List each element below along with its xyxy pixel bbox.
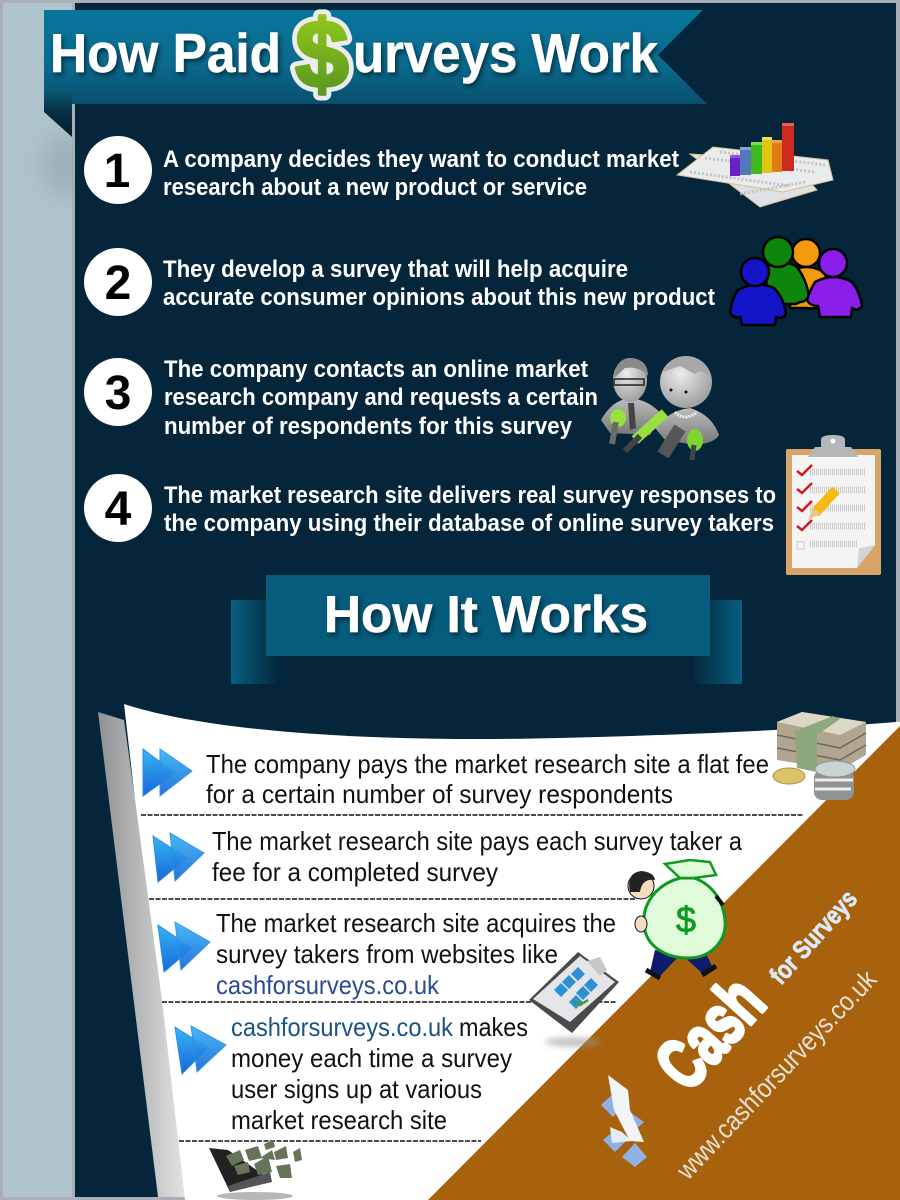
icon: tablet checklist xyxy=(529,952,619,1047)
number badge 1: 1 xyxy=(104,145,130,198)
ribbon side left xyxy=(231,600,278,684)
logo word cash: Cash xyxy=(640,962,780,1105)
step 3 text: The company contacts an online market xyxy=(164,356,588,383)
step 3 text: number of respondents for this survey xyxy=(164,413,573,440)
title text left: How Paid xyxy=(50,22,281,84)
paper shadow page xyxy=(98,712,190,1197)
number badge 3: 3 xyxy=(105,367,131,420)
step 2 text xyxy=(163,256,715,311)
item text: makes xyxy=(459,1012,528,1042)
icon: clipboard with checklist xyxy=(786,435,881,575)
legs xyxy=(650,948,712,976)
item text: cashforsurveys.co.uk xyxy=(231,1012,454,1042)
white page xyxy=(124,704,900,1200)
icon: chart on papers xyxy=(677,123,833,207)
item text: survey takers from websites like xyxy=(216,939,558,969)
ribbon centre xyxy=(266,575,710,656)
banner ribbon xyxy=(44,10,707,104)
brown corner xyxy=(428,726,900,1200)
list item 4 xyxy=(175,1012,528,1135)
paper panel xyxy=(98,704,900,1200)
dollar sign icon: $ xyxy=(295,1,349,108)
step 1 xyxy=(84,123,833,207)
item text: for a certain number of survey respondents xyxy=(206,779,673,809)
title banner xyxy=(44,1,707,140)
number badge 1 xyxy=(84,136,152,204)
number badge 4: 4 xyxy=(105,483,132,536)
step 3 xyxy=(84,356,719,460)
arrow icon xyxy=(158,922,210,972)
item text: The market research site pays each survey taker a xyxy=(212,826,742,856)
item text xyxy=(212,826,742,887)
title text right: urveys Work xyxy=(353,22,658,84)
step 2 text: accurate consumer opinions about this new product xyxy=(163,284,715,311)
item text xyxy=(206,749,769,809)
arrow icon xyxy=(143,749,192,796)
step 1 text: research about a new product or service xyxy=(163,174,587,201)
step 2 text: They develop a survey that will help acquire xyxy=(163,256,628,283)
step 3 text: research company and requests a certain xyxy=(164,384,598,411)
step 2 xyxy=(84,237,862,325)
step 4 text xyxy=(164,482,776,537)
bag xyxy=(644,878,725,958)
head xyxy=(628,873,654,899)
item text: money each time a survey xyxy=(231,1043,512,1073)
item text xyxy=(216,908,616,1000)
heading text: How It Works xyxy=(324,586,648,644)
arrow icon xyxy=(175,1026,226,1074)
number badge 2: 2 xyxy=(105,257,131,310)
item text: cashforsurveys.co.uk xyxy=(216,970,440,1000)
number badge 2 xyxy=(84,248,152,316)
item text: The company pays the market research site a flat fee xyxy=(206,749,769,779)
icon: money stack and coins xyxy=(773,712,866,800)
step 1 text: A company decides they want to conduct market xyxy=(163,146,679,173)
dollar sign icon: $ xyxy=(295,1,349,108)
item text xyxy=(231,1012,528,1135)
list item 2 xyxy=(153,826,742,887)
left side strip xyxy=(3,3,73,1197)
item text: user signs up at various xyxy=(231,1074,482,1104)
list item 3 xyxy=(158,908,616,1000)
icon: laptop with flying money xyxy=(209,1140,302,1200)
item text: The market research site acquires the xyxy=(216,908,616,938)
banner fold xyxy=(44,90,72,137)
icon: man carrying money bag: $ xyxy=(676,899,696,940)
logo words for surveys: for Surveys xyxy=(763,884,863,990)
item text: market research site xyxy=(231,1105,447,1135)
icon: man carrying money bag xyxy=(628,860,725,978)
logo mark xyxy=(601,1075,647,1167)
arrow icon xyxy=(153,833,204,882)
icon: interviewed people xyxy=(601,356,719,460)
step 1 text xyxy=(163,146,679,201)
item text: fee for a completed survey xyxy=(212,857,498,887)
ribbon side right xyxy=(694,600,742,684)
how it works heading xyxy=(231,575,742,684)
logo: cash for surveys xyxy=(601,884,883,1186)
number badge 4 xyxy=(84,474,152,542)
step 3 text xyxy=(164,356,598,440)
step 4 text: The market research site delivers real survey responses to xyxy=(164,482,776,509)
step 4 xyxy=(84,435,881,575)
step 4 text: the company using their database of online survey takers xyxy=(164,510,774,537)
icon: group of people xyxy=(730,237,862,325)
list item 1 xyxy=(143,749,769,809)
number badge 3 xyxy=(84,358,152,426)
